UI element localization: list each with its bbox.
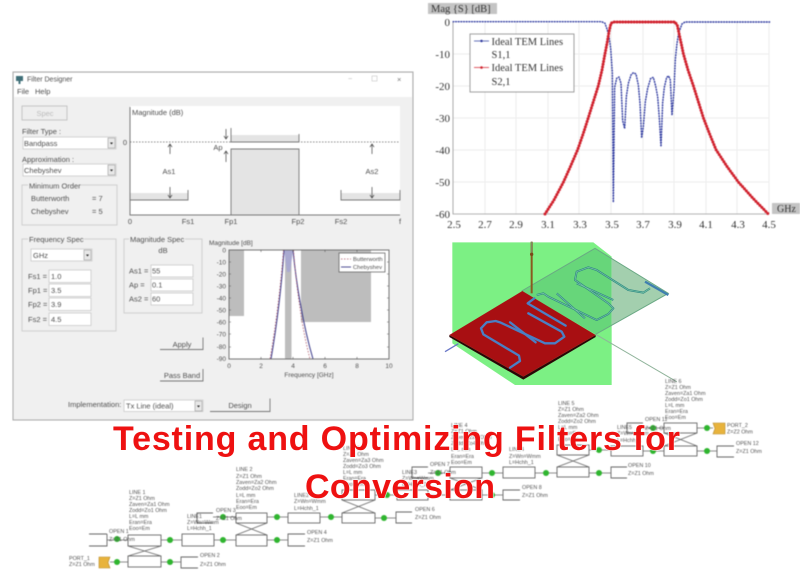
frequency spec group: 3.9 — [51, 300, 61, 309]
title: Testing and Optimizing Filters for — [113, 420, 680, 458]
chart: ideal filter specification: Fp1 — [225, 217, 237, 226]
chart: magnitude vs frequency response: -40 — [217, 296, 226, 302]
x-axis labels: 3.1 — [541, 219, 555, 231]
schematic component labels: OPEN 2 — [200, 553, 220, 559]
frequency spec group: 1.0 — [51, 272, 61, 281]
schematic component labels: Z=Z1 Ohm — [343, 452, 369, 458]
x-axis labels: 2.7 — [478, 219, 492, 231]
schematic component labels: L=L mm — [129, 514, 149, 520]
title — [113, 420, 680, 506]
magnitude spec group: dB — [158, 246, 168, 255]
x-axis labels: 2.5 — [447, 219, 461, 231]
y-axis labels: 0 — [444, 17, 450, 29]
chart: ideal filter specification: 0 — [128, 217, 132, 226]
schematic component labels: Zaven=Za2 Ohm — [558, 413, 599, 419]
port 2 — [713, 423, 753, 436]
chart legend — [339, 253, 385, 272]
magnitude spec group: As2 = — [129, 294, 149, 304]
button: spec — [22, 106, 67, 120]
button: pass band: Pass Band — [164, 371, 200, 380]
schematic component labels: OPEN 12 — [736, 441, 759, 447]
frequency spec group: Fs1 = — [28, 272, 48, 281]
chart: ideal filter specification: 0 — [123, 138, 127, 147]
x-axis labels: 3.7 — [636, 219, 650, 231]
schematic component labels: Eran=Era — [665, 409, 688, 415]
button: apply: Apply — [173, 340, 192, 349]
schematic component labels: L=Hchh_1 — [402, 482, 427, 488]
chart: magnitude vs frequency response: -80 — [217, 344, 226, 351]
magnitude spec group: As1 = — [129, 266, 149, 276]
chart: magnitude vs frequency response: 0 — [222, 248, 226, 254]
schematic component labels: Zaven=Za3 Ohm — [343, 458, 384, 464]
title bar: Help — [35, 87, 50, 96]
frequency spec group — [22, 235, 116, 331]
chart: magnitude vs frequency response: Magnitude [dB] — [209, 240, 253, 247]
magnitude spec group: 0.1 — [152, 280, 162, 290]
chart: ideal filter specification: As1 — [163, 167, 175, 176]
schematic component labels: Z=Z1 Ohm — [628, 471, 654, 477]
approximation select: Approximation : — [22, 155, 74, 164]
x-axis labels: 3.9 — [668, 219, 682, 231]
chart: magnitude vs frequency response: 2 — [259, 363, 263, 370]
schematic component labels: OPEN 1 — [109, 529, 129, 535]
chart: ideal filter specification — [123, 106, 402, 226]
chart: magnitude vs frequency response: -30 — [217, 284, 226, 290]
implementation select: Implementation: — [68, 400, 121, 409]
schematic component labels: Zaven=Za1 Ohm — [129, 502, 170, 508]
schematic component labels: Z=Wn=Wmm — [187, 520, 219, 526]
schematic component labels: Z=Wn=Wmm — [617, 431, 649, 437]
chart legend — [470, 34, 574, 92]
schematic component labels: Zaven=Za1 Ohm — [665, 391, 706, 397]
chart legend: Ideal TEM Lines — [492, 37, 563, 48]
schematic component labels: Z=Z1 Ohm — [522, 493, 548, 499]
implementation select — [68, 400, 203, 412]
schematic component labels: Eran=Era — [451, 454, 474, 460]
chart: magnitude vs frequency response: 4 — [291, 363, 295, 370]
schematic component labels: LINE5 — [617, 425, 632, 431]
schematic component labels: L=Hchh_1 — [187, 526, 212, 532]
schematic component labels: Z=Z1 Ohm — [736, 449, 762, 455]
schematic component labels — [109, 379, 762, 568]
schematic component labels: LINE3 — [402, 470, 417, 476]
x-axis unit — [772, 203, 800, 215]
chart legend: S2,1 — [492, 77, 510, 88]
y-axis labels: -30 — [435, 113, 450, 125]
schematic component labels: Z=Z1 Ohm — [129, 496, 155, 502]
schematic component labels: Zodd=Zo1 Ohm — [129, 508, 167, 514]
panel: filter designer window — [13, 72, 413, 420]
diagram: 3D microstrip filter model — [445, 242, 677, 385]
chart: magnitude vs frequency response: -60 — [217, 320, 226, 326]
schematic component labels: Eran=Era — [129, 520, 152, 526]
schematic component labels: OPEN 4 — [307, 530, 327, 536]
schematic component labels: Z=Z1 Ohm — [200, 562, 226, 568]
wiring — [107, 428, 717, 562]
x-axis labels: 2.9 — [509, 219, 523, 231]
curve: S2,1 — [545, 22, 768, 214]
chart: ideal filter specification: Fp2 — [292, 217, 304, 226]
y-axis labels: -20 — [435, 81, 450, 93]
schematic component labels: Eoo=Em — [558, 437, 579, 443]
minimum order group: = 7 — [92, 194, 103, 203]
chart legend: Ideal TEM Lines — [492, 63, 563, 74]
minimum order group — [22, 182, 117, 225]
y-axis labels — [435, 17, 450, 221]
schematic component labels: L=Hchh_1 — [294, 506, 319, 512]
translucent upper substrate — [522, 248, 668, 334]
chart: ideal filter specification: Fs2 — [335, 217, 347, 226]
schematic component labels: Z=Z1 Ohm — [430, 470, 456, 476]
title: Conversion — [305, 468, 495, 506]
x-axis labels: 4.5 — [762, 219, 776, 231]
green nodes — [114, 425, 710, 565]
title bar — [14, 73, 412, 97]
schematic component labels: Zaven=Za4 Ohm — [451, 435, 492, 441]
schematic component labels: LINE 2 — [236, 467, 252, 473]
title bar: File — [17, 87, 29, 96]
minimum order group: Minimum Order — [29, 182, 81, 190]
open stubs — [89, 423, 734, 568]
schematic component labels: Z=Z1 Ohm — [451, 429, 477, 435]
schematic component labels: L=L mm — [665, 403, 685, 409]
schematic component labels: Z=Z1 Ohm — [645, 426, 671, 432]
minimum order group: Butterworth — [31, 194, 69, 203]
port 1: Z=Z1 Ohm — [69, 562, 95, 568]
title bar: × — [397, 75, 401, 84]
chart: ideal filter specification: As2 — [366, 167, 378, 176]
schematic component labels: Z=Z1 Ohm — [415, 515, 441, 521]
frequency spec group: GHz — [33, 251, 48, 260]
x-axis labels: 4.1 — [699, 219, 713, 231]
chart legend: S1,1 — [492, 50, 510, 61]
schematic component labels: Zaven=Za2 Ohm — [236, 480, 277, 486]
magnitude spec group: Ap = — [129, 280, 145, 290]
schematic component labels: LINE2 — [294, 493, 309, 499]
curve: S1,1 — [453, 22, 770, 202]
schematic component labels: Z=Z1 Ohm — [665, 385, 691, 391]
port 1 — [69, 556, 110, 568]
title bar: − — [348, 74, 353, 83]
chart: magnitude vs frequency response: 8 — [355, 363, 359, 370]
diagram: coupled-line circuit schematic — [69, 379, 762, 568]
frequency spec group: 3.5 — [51, 286, 61, 295]
schematic component labels: Z=Z1 Ohm — [109, 537, 135, 543]
minimum order group: Chebyshev — [31, 207, 69, 216]
y-axis labels: -60 — [435, 209, 450, 221]
implementation select: Tx Line (ideal) — [126, 402, 174, 410]
schematic component labels: OPEN 3 — [216, 508, 236, 514]
schematic component labels: Zodd=Zo2 Ohm — [236, 486, 274, 492]
chart: magnitude vs frequency response: -50 — [217, 308, 226, 314]
schematic component labels: OPEN 11 — [645, 417, 667, 423]
schematic component labels: OPEN 7 — [430, 462, 450, 468]
schematic component labels: OPEN 10 — [628, 463, 651, 469]
schematic component labels: Zodd=Zo2 Ohm — [558, 419, 596, 425]
schematic component labels: Eran=Era — [558, 431, 581, 437]
schematic component labels: Eoo=Em — [665, 415, 686, 421]
schematic component labels: L=L mm — [236, 493, 256, 499]
button: design — [210, 398, 270, 412]
schematic component labels: L=L mm — [558, 425, 578, 431]
x-axis labels — [447, 219, 776, 231]
schematic component labels: L=Hchh_1 — [617, 438, 642, 444]
schematic component labels: L=L mm — [343, 470, 363, 476]
x-axis labels: 3.5 — [605, 219, 619, 231]
frequency spec group: Fs2 = — [28, 315, 48, 324]
title bar: Filter Designer — [27, 76, 73, 84]
magnitude spec group: Magnitude Spec — [130, 235, 184, 244]
frequency spec group: Fp2 = — [28, 300, 48, 309]
chart: magnitude vs frequency response: -90 — [217, 356, 226, 363]
schematic component labels: Zodd=Zo1 Ohm — [665, 397, 703, 403]
schematic component labels: Z=Z1 Ohm — [216, 516, 242, 522]
chart: ideal filter specification: Ap — [213, 143, 223, 152]
schematic component labels: LINE 4 — [451, 423, 467, 429]
schematic component labels: Z=Z1 Ohm — [236, 474, 262, 480]
schematic component labels: Z=Z1 Ohm — [307, 538, 333, 544]
frequency spec group: Frequency Spec — [29, 235, 84, 244]
button: design: Design — [228, 401, 252, 410]
schematic component labels: LINE 6 — [665, 379, 681, 385]
x-axis labels: 3.3 — [573, 219, 587, 231]
chart legend: Chebyshev — [353, 265, 382, 271]
x-axis unit: GHz — [777, 204, 796, 215]
vertical probe — [530, 242, 533, 293]
chart: magnitude vs frequency response: 0 — [227, 363, 231, 370]
filter type select: Bandpass — [24, 139, 58, 148]
chart: ideal filter specification: Fs1 — [182, 217, 194, 226]
port 2: Z=Z2 Ohm — [727, 430, 753, 436]
button: apply — [160, 338, 203, 350]
approximation select — [22, 155, 116, 176]
chart legend: Butterworth — [353, 257, 383, 263]
schematic component labels: Z=Z1 Ohm — [558, 407, 584, 413]
button: pass band — [160, 369, 203, 381]
schematic component labels: LINE 3 — [343, 446, 359, 452]
chart: magnitude vs frequency response: -20 — [217, 272, 226, 278]
schematic component labels: Z=Wn=Wmm — [402, 476, 434, 482]
schematic component labels: Zodd=Zo3 Ohm — [343, 464, 381, 470]
chart: magnitude vs frequency response: 10 — [385, 363, 393, 370]
y-axis labels: -50 — [435, 177, 450, 189]
schematic component labels: LINE1 — [187, 514, 202, 520]
magnitude spec group: 60 — [152, 294, 160, 304]
approximation select: Chebyshev — [24, 166, 62, 175]
chart: magnitude vs frequency response: Frequency [GHz] — [284, 372, 334, 379]
schematic component labels: Zodd=Zo4 Ohm — [451, 441, 489, 447]
chart: magnitude vs frequency response — [209, 240, 393, 379]
chart: ideal filter specification: Magnitude (dB) — [132, 108, 184, 117]
schematic component labels: LINE 1 — [129, 490, 145, 496]
filter type select — [22, 127, 116, 149]
single line sections — [182, 446, 643, 546]
y-axis labels: -40 — [435, 145, 450, 157]
chart: ideal filter specification: f — [399, 217, 402, 226]
chart: S-parameter magnitude vs frequency — [428, 3, 800, 231]
schematic component labels: L=Hchh_1 — [509, 460, 534, 466]
button: spec: Spec — [36, 109, 54, 118]
magnitude spec group: 55 — [152, 266, 160, 276]
schematic component labels: Eran=Era — [343, 476, 366, 482]
y-axis title: Mag {S} [dB] — [431, 4, 491, 15]
schematic component labels: Eoo=Em — [343, 482, 364, 488]
schematic component labels: Eran=Era — [236, 499, 259, 505]
y-axis labels: -10 — [435, 49, 450, 61]
minimum order group: = 5 — [92, 207, 103, 216]
chart: magnitude vs frequency response: -10 — [217, 260, 226, 266]
schematic component labels: OPEN 8 — [522, 485, 542, 491]
schematic component labels: L=L mm — [451, 447, 471, 453]
schematic component labels: Eoo=Em — [129, 526, 150, 532]
schematic component labels: OPEN 6 — [415, 507, 435, 513]
port 1: PORT_1 — [69, 556, 90, 562]
frequency spec group: Fp1 = — [28, 286, 48, 295]
schematic component labels: Z=Wn=Wmm — [294, 499, 326, 505]
chart: magnitude vs frequency response: -70 — [217, 332, 226, 338]
port 2: PORT_2 — [727, 423, 748, 429]
schematic component labels: LINE4 — [509, 447, 524, 453]
magnitude spec group — [124, 235, 202, 313]
x-axis labels: 4.3 — [731, 219, 745, 231]
frequency spec group: 4.5 — [51, 315, 61, 324]
schematic component labels: LINE 5 — [558, 401, 574, 407]
blue microstrip traces — [481, 298, 566, 368]
schematic component labels: Z=Wn=Wmm — [509, 454, 541, 460]
coupled line sections — [128, 423, 697, 567]
chart: magnitude vs frequency response: 6 — [323, 363, 327, 370]
filter type select: Filter Type : — [22, 127, 61, 136]
red lower plate — [449, 291, 596, 380]
schematic component labels: Eoo=Em — [236, 505, 257, 511]
schematic component labels: Eoo=Em — [451, 460, 472, 466]
